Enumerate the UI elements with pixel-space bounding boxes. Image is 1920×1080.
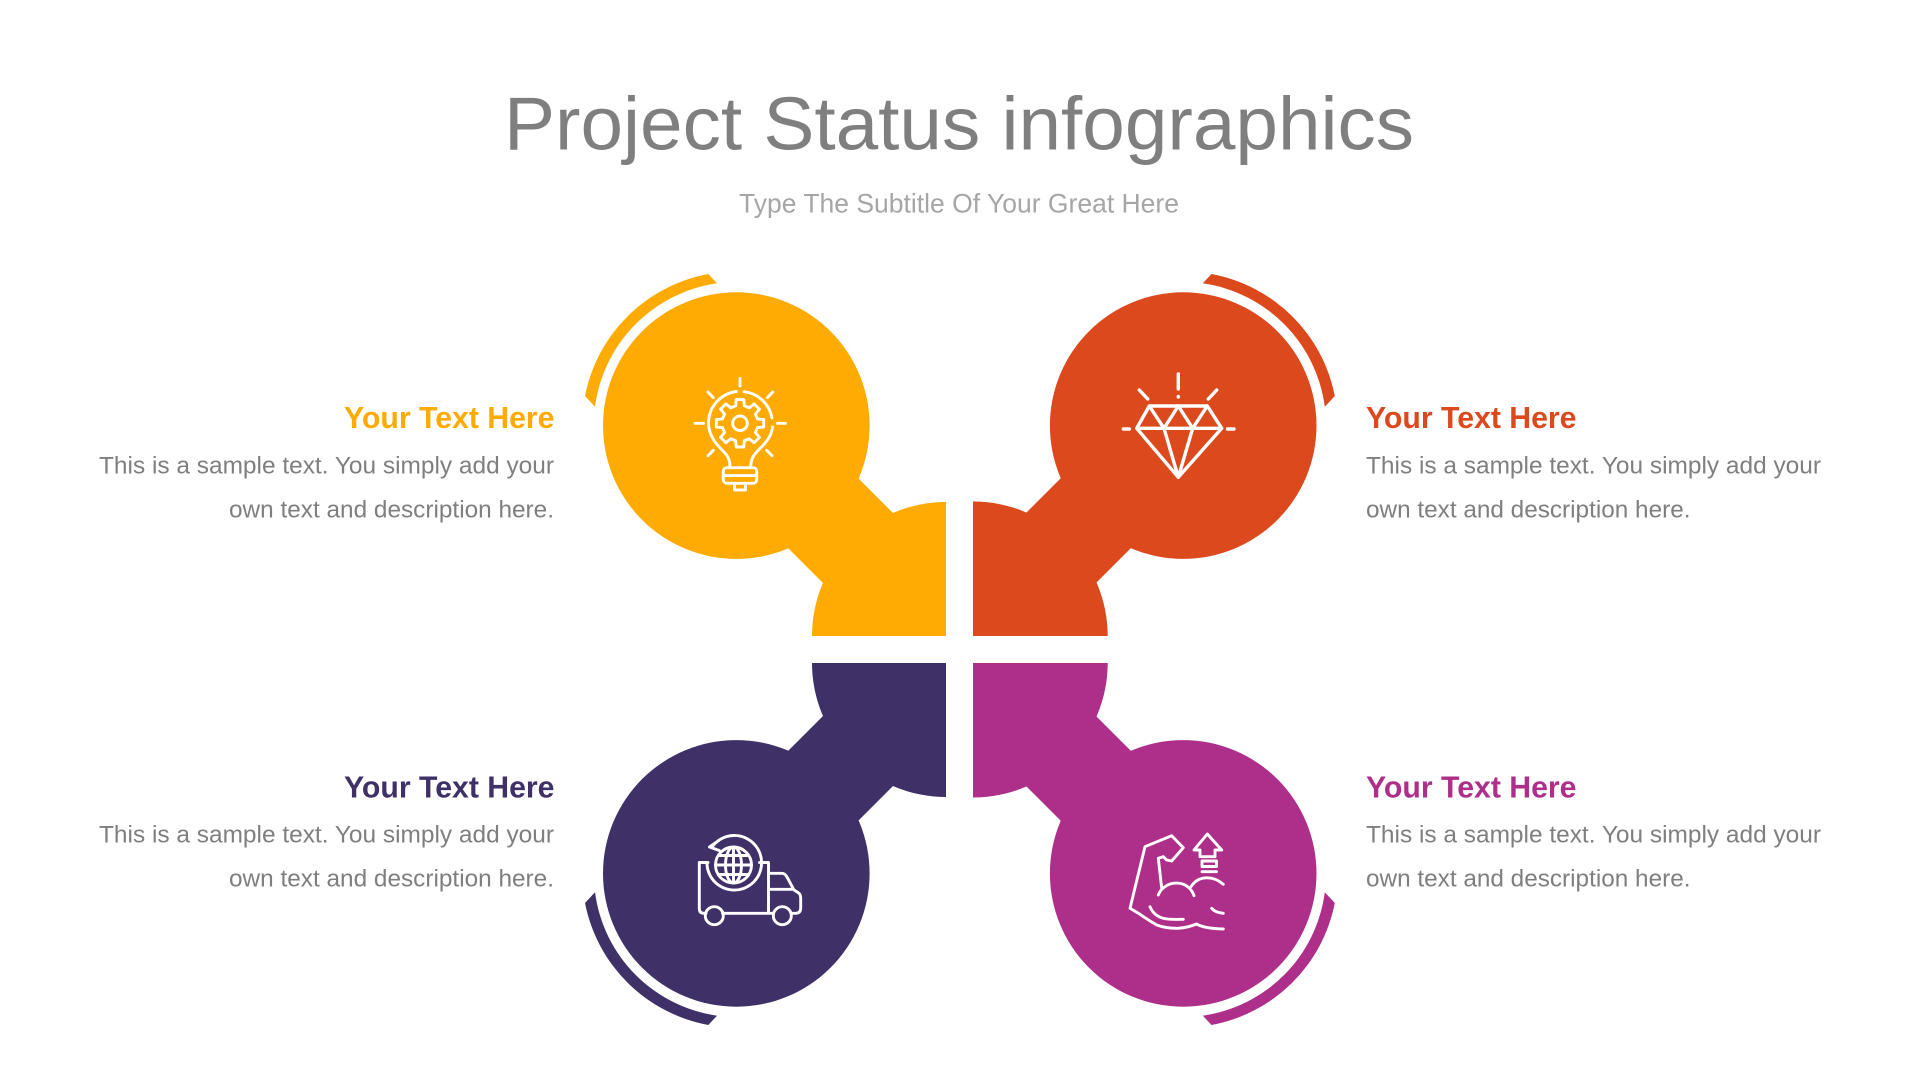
- body text: bottom right: This is a sample text. You simply add your: [1366, 821, 1821, 848]
- panel: bottom right magenta: [973, 663, 1821, 1025]
- accent arc: orange: [585, 274, 717, 407]
- panel: bottom left purple: [99, 663, 946, 1025]
- panel: top left orange: [99, 274, 946, 636]
- icon: delivery truck with globe: [699, 835, 801, 925]
- body text: bottom left: [99, 821, 554, 893]
- title: Project Status infographics: [504, 82, 1414, 166]
- heading: top right: Your Text Here: [1366, 400, 1576, 435]
- panel: top right red: [973, 274, 1821, 636]
- petal shape: purple: [603, 663, 946, 1007]
- body text: top left: [99, 452, 554, 524]
- body text: top right: [1366, 452, 1821, 524]
- petal shape: magenta: [973, 663, 1316, 1007]
- petal shape: orange: [603, 292, 946, 636]
- accent arc: purple: [585, 892, 717, 1025]
- heading: bottom left: Your Text Here: [344, 769, 554, 804]
- heading: bottom right: Your Text Here: [1366, 769, 1576, 804]
- icon: light bulb with gear: [695, 378, 786, 490]
- body text: bottom right: [1366, 821, 1821, 893]
- body text: top right: This is a sample text. You simply add your: [1366, 452, 1821, 479]
- body text: bottom right: own text and description here.: [1366, 866, 1690, 893]
- accent arc: red: [1203, 274, 1335, 407]
- body text: top right: own text and description here.: [1366, 497, 1690, 524]
- icon: diamond: [1123, 374, 1234, 477]
- body text: bottom left: This is a sample text. You simply add your: [99, 821, 554, 848]
- body text: top left: This is a sample text. You simply add your: [99, 452, 554, 479]
- petal shape: red: [973, 292, 1316, 636]
- icon: flexed arm with up arrow: [1130, 834, 1223, 929]
- body text: top left: own text and description here.: [229, 497, 554, 524]
- body text: bottom left: own text and description here.: [229, 866, 554, 893]
- subtitle: Type The Subtitle Of Your Great Here: [739, 188, 1179, 218]
- heading: top left: Your Text Here: [344, 400, 554, 435]
- accent arc: magenta: [1203, 892, 1335, 1025]
